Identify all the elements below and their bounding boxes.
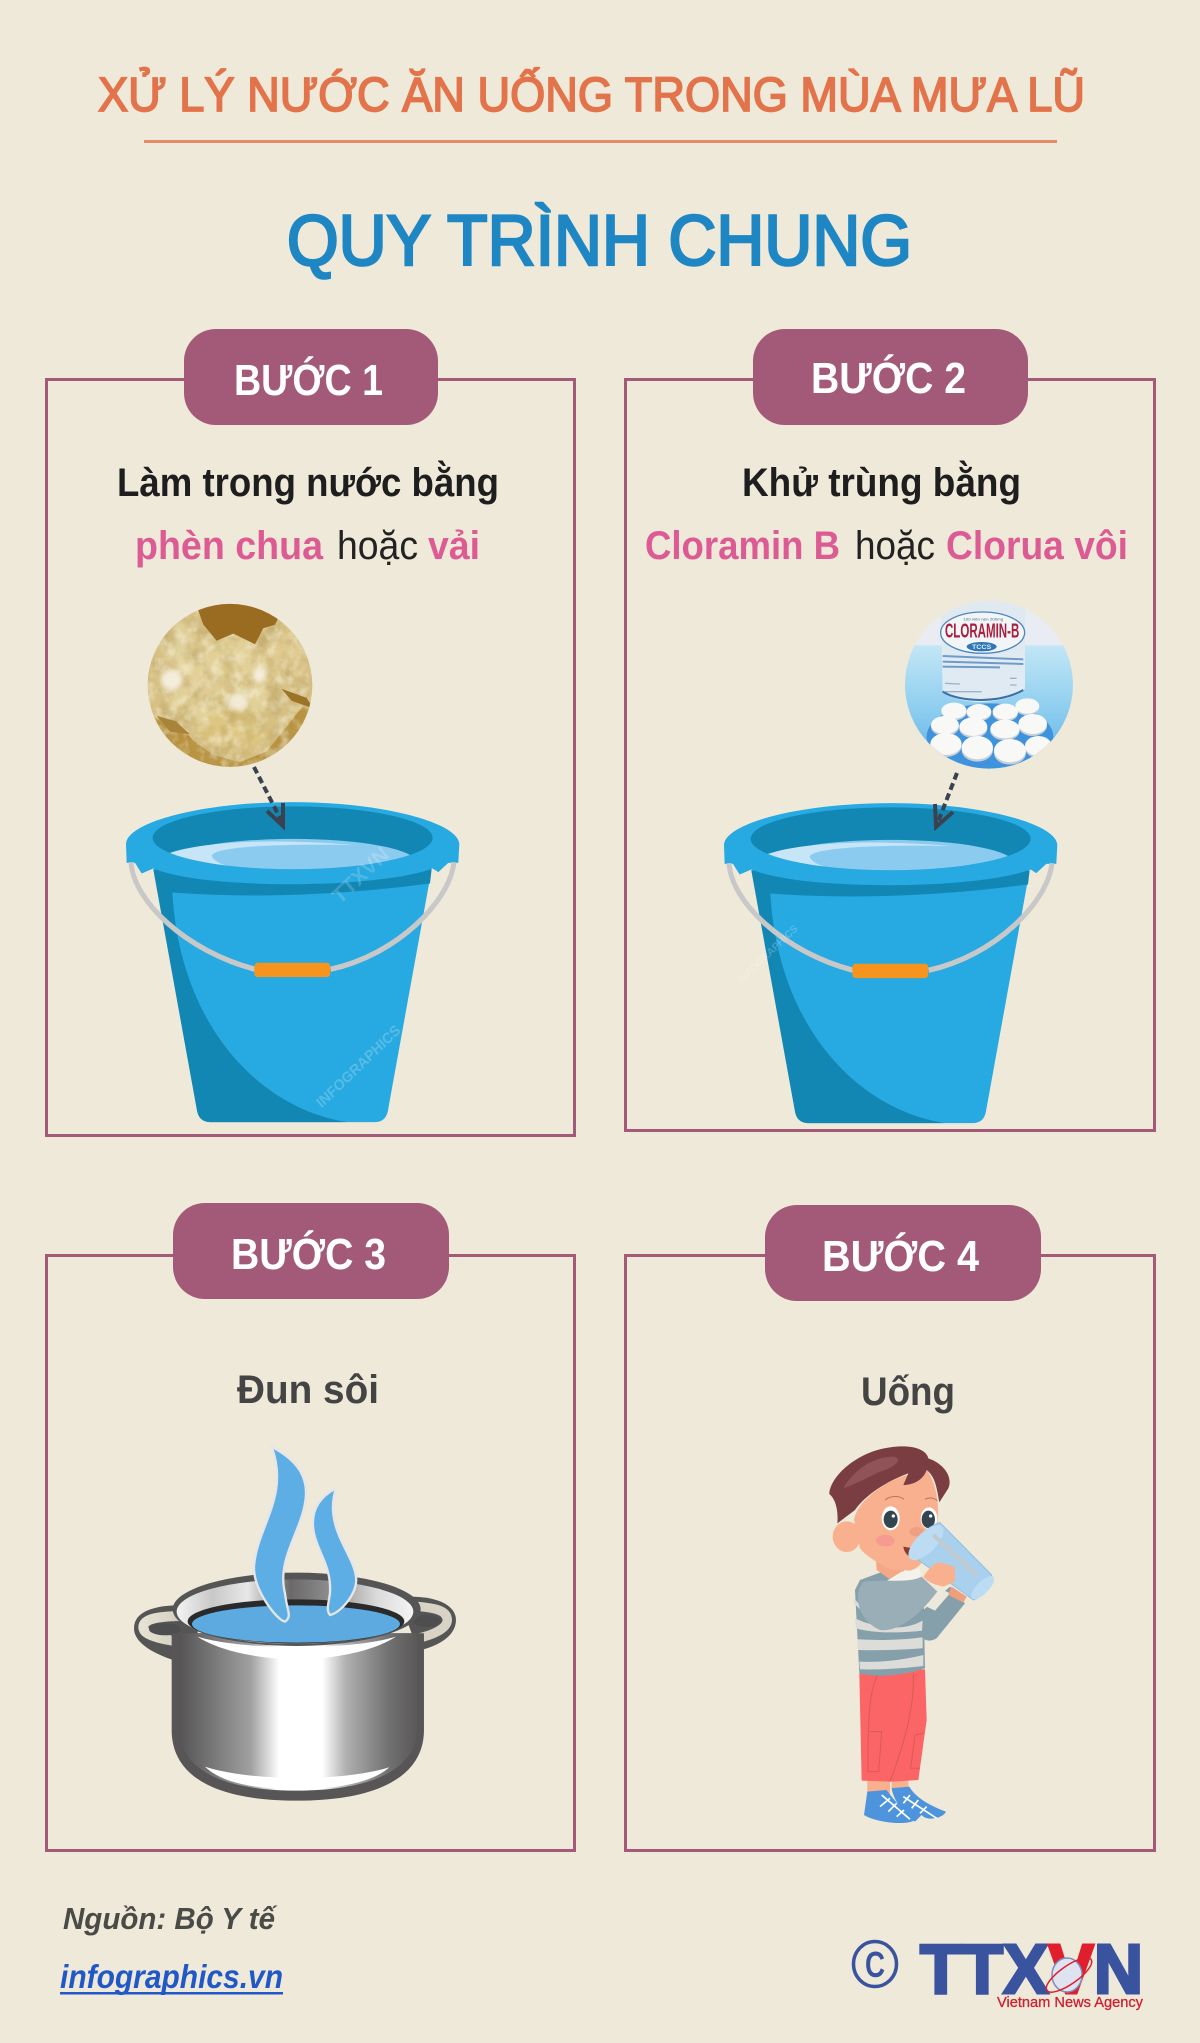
panel: step 1 [46,329,574,1136]
copyright mark: C [865,1944,885,1985]
icon: bucket: TTXVN [328,842,394,909]
subtitle: QUY TRÌNH CHUNG [287,202,912,281]
icon: boiling pot [134,1447,456,1801]
step 1 badge [184,329,438,425]
step 3 description: Đun sôi [237,1368,379,1412]
step 2 badge [753,329,1028,425]
step 3 badge: BƯỚC 3 [231,1229,386,1279]
arrow: tablets to bucket [935,773,957,827]
icon: bucket: INFOGRAPHICS [314,1022,404,1112]
logo: TTXVN: TTXVN [920,1930,1143,2008]
step 1 description: hoặc [337,524,418,568]
step 4 badge [765,1205,1041,1301]
logo: TTXVN: Vietnam News Agency [997,1994,1143,2011]
step 1 description: Làm trong nước bằng [117,459,499,505]
step 1 description: vải [428,524,480,568]
icon: bucket: INFOGRAPHICS [736,923,800,987]
step 2 description: Cloramin B [645,524,840,568]
icon: cloramin b tablets: TCCS [972,644,992,651]
icon: cloramin b tablets [905,600,1073,769]
icon: alum crystals [148,604,312,767]
step 2 badge: BƯỚC 2 [811,353,966,403]
icon: cloramin b tablets: CLORAMIN-B [945,620,1019,642]
step 1 badge: BƯỚC 1 [234,355,383,405]
step 1 description: phèn chua [135,524,324,568]
website link: infographics.vn [60,1958,283,1995]
step 2 description: Clorua vôi [946,524,1128,568]
arrow: alum to bucket [254,767,283,826]
step 4 description: Uống [861,1370,955,1414]
step 2 description [645,459,1128,568]
icon: bucket [126,802,459,1122]
icon: boy drinking water [829,1446,998,1823]
source note: Nguồn: Bộ Y tế [63,1901,278,1936]
icon: bucket [724,803,1057,1123]
step 2 description: Khử trùng bằng [742,459,1021,505]
title: XỬ LÝ NƯỚC ĂN UỐNG TRONG MÙA MƯA LŨ [98,67,1085,122]
panel: step 2 [626,329,1154,1130]
step 4 badge: BƯỚC 4 [822,1231,979,1281]
step 2 description: hoặc [855,524,935,568]
icon: cloramin b tablets: 100 viên nén 200mg [963,617,1003,622]
panel: step 3 [46,1203,574,1850]
step 1 description [117,459,499,568]
step 3 badge [173,1203,449,1299]
panel: step 4 [626,1205,1154,1850]
copyright mark [854,1942,896,1986]
